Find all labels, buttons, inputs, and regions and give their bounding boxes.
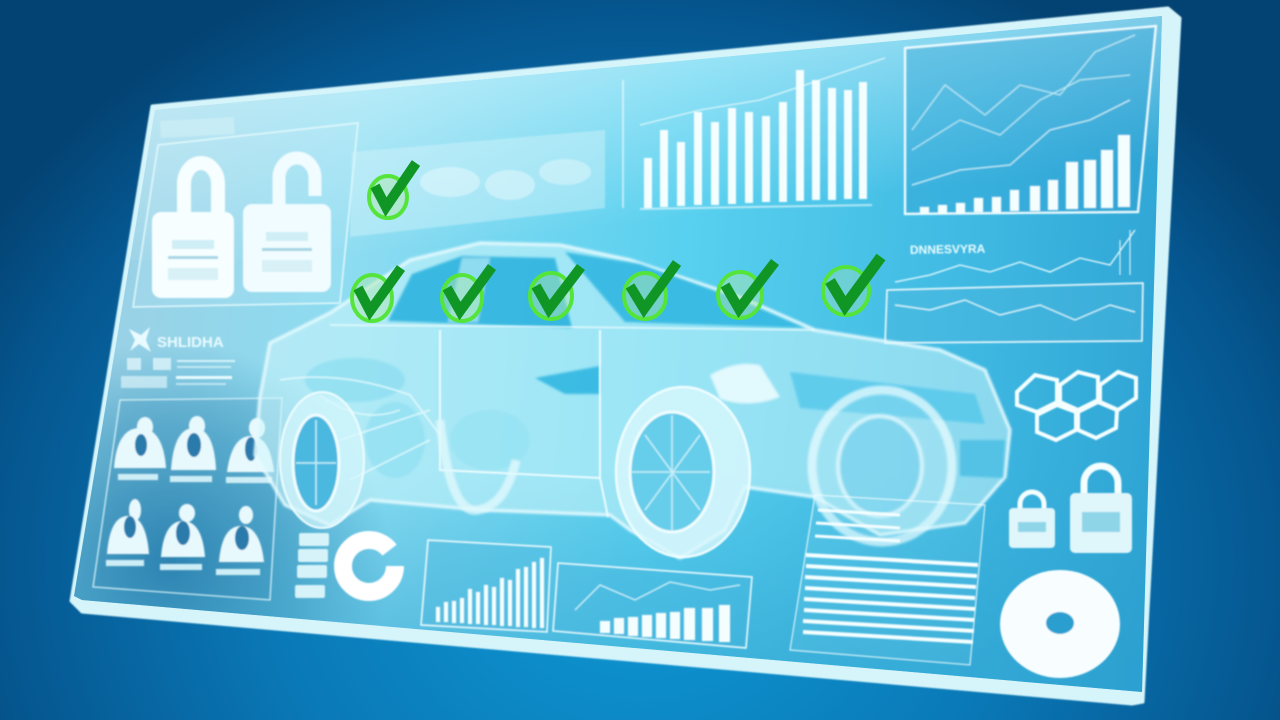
car engine details: [305, 358, 530, 478]
panel: users: [93, 398, 282, 600]
icon: check 1: [369, 163, 416, 218]
icon: small padlock: [1009, 492, 1055, 548]
chart: bottom bar chart 1: [421, 540, 551, 632]
list bars: [295, 533, 329, 598]
panel: map: [350, 130, 605, 237]
panel: left info block: [121, 327, 235, 388]
icon: check 6: [718, 262, 775, 318]
icon: hexagons: [1017, 372, 1136, 440]
icon: check 5: [624, 263, 677, 319]
icon: check marks: [352, 163, 881, 321]
icon: check 2: [352, 268, 401, 321]
icon: rear wheel: [812, 390, 952, 542]
chart: lower right sparkline panel: [885, 283, 1143, 343]
panel: locks: [133, 117, 358, 307]
icon: mid wheel: [616, 387, 750, 557]
panel: text lines: [790, 495, 985, 665]
car body: [255, 243, 1010, 558]
chart: top bar chart: [622, 58, 885, 210]
car door and structure lines: [280, 325, 815, 517]
illustration: transparent car: [255, 243, 1010, 558]
chart: middle right sparkline: DNNESVYRA: [910, 242, 986, 257]
icon: open padlock: [243, 158, 331, 292]
chart: donut: [343, 540, 395, 592]
tab: panel heading: [160, 117, 235, 138]
chart: top right line and bar chart: [905, 26, 1156, 214]
chart: bottom bar chart 2: [553, 563, 752, 648]
headlight: [710, 364, 780, 404]
chart: middle right sparkline: [895, 230, 1135, 282]
car windows: [388, 252, 1005, 478]
icon: disc: [1000, 570, 1120, 678]
icon: front wheel: [280, 392, 364, 528]
icon: check 4: [530, 267, 581, 319]
panel: left info block: SHLIDHA: [157, 334, 224, 351]
icon: check 7: [823, 257, 881, 315]
icon: closed padlock: [152, 163, 234, 298]
icon: check 3: [442, 267, 492, 321]
icon: user group: [106, 416, 274, 575]
icon: large padlock: [1070, 466, 1132, 553]
ghost wheel: [440, 420, 516, 510]
